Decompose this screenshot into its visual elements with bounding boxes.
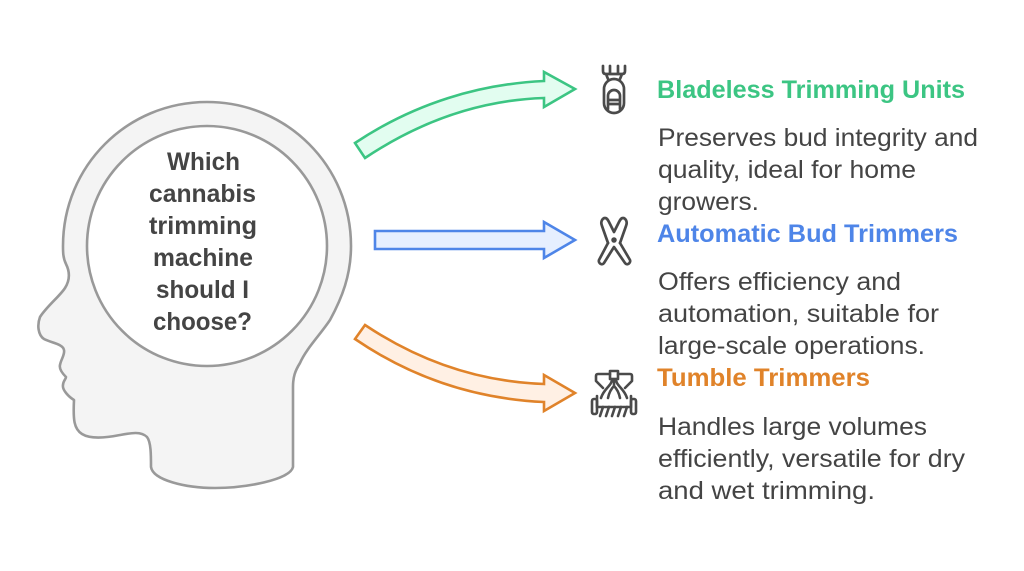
question text: choose?	[153, 308, 252, 336]
icon: bladeless trimmer	[603, 66, 625, 113]
icon: tumble trimmer	[592, 371, 636, 416]
heading: Bladeless Trimming Units: Bladeless Trimming Units	[657, 76, 965, 104]
description: bladeless: quality, ideal for home	[658, 156, 916, 184]
question text: should I	[156, 276, 249, 304]
question text	[149, 148, 257, 336]
description: bladeless: growers.	[658, 188, 759, 216]
inner circle	[87, 126, 327, 366]
question text: machine	[153, 244, 253, 272]
question text: Which	[167, 148, 240, 176]
icon: shears	[599, 218, 630, 264]
description: automatic: automation, suitable for	[658, 300, 939, 328]
description: automatic: large-scale operations.	[658, 332, 925, 360]
description: tumble: efficiently, versatile for dry	[658, 445, 966, 473]
arrow: blue	[375, 222, 575, 258]
arrow: green	[355, 72, 575, 158]
description: tumble: and wet trimming.	[658, 477, 875, 505]
head silhouette	[38, 102, 351, 488]
description: bladeless: Preserves bud integrity and	[658, 124, 978, 152]
description: tumble: Handles large volumes	[658, 413, 927, 441]
description: tumble	[658, 413, 966, 505]
heading: Tumble Trimmers: Tumble Trimmers	[657, 364, 870, 392]
question text: trimming	[149, 212, 257, 240]
description: automatic	[658, 268, 939, 360]
description: automatic: Offers efficiency and	[658, 268, 901, 296]
description: bladeless	[658, 124, 978, 216]
question text: cannabis	[149, 180, 256, 208]
arrow: orange	[355, 325, 575, 411]
heading: Automatic Bud Trimmers: Automatic Bud Trimmers	[657, 220, 958, 248]
